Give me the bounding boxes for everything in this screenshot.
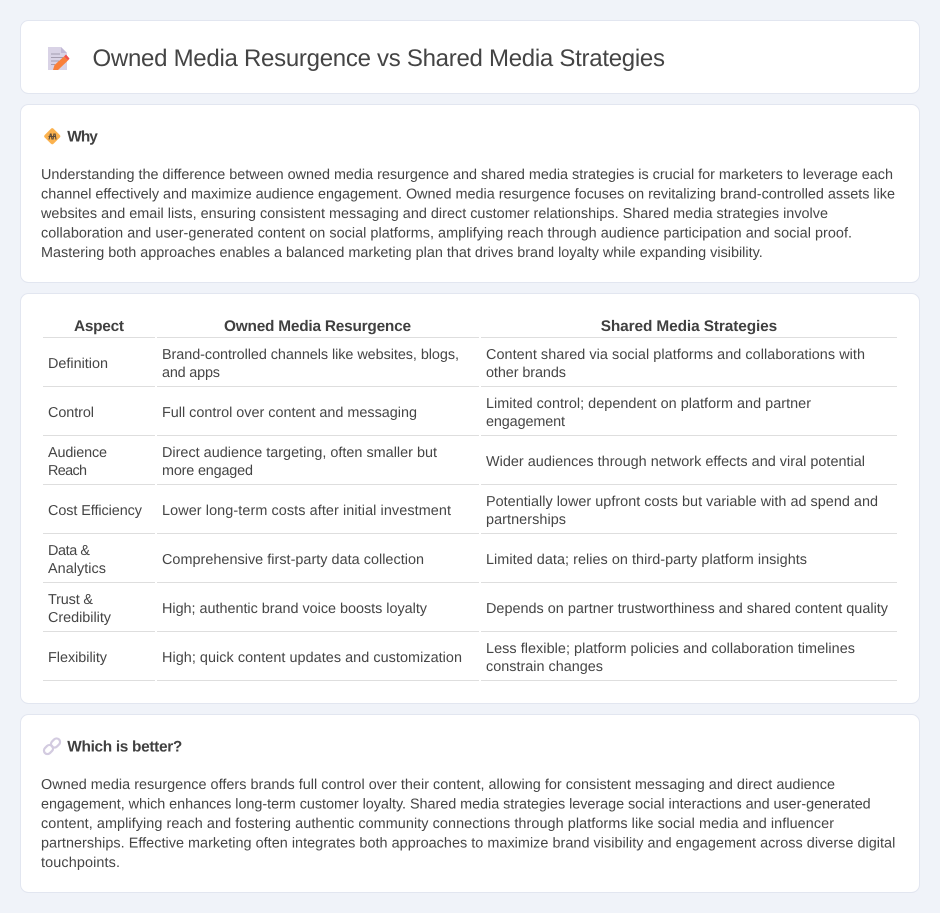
icon: document with pencil [48, 47, 70, 70]
why paragraph: collaboration and user-generated content on social platforms, amplifying reach through audience participation and social proof. [41, 226, 852, 242]
row: control: Limited control; dependent on platform and partner [486, 396, 811, 412]
title: Owned Media Resurgence vs Shared Media Strategies [92, 45, 665, 72]
row: audience reach: Reach [48, 463, 87, 479]
panel: title header [20, 20, 920, 94]
why paragraph: Mastering both approaches enables a balanced marketing plan that drives brand loyalty while expanding visibility. [41, 245, 763, 261]
row: data and analytics: Comprehensive first-party data collection [162, 552, 424, 568]
table header row [43, 318, 897, 338]
row: audience reach: Audience [48, 445, 107, 461]
heading: which is better: Which is better? [67, 738, 182, 756]
panel: which is better [20, 714, 920, 892]
row: data and analytics [43, 543, 897, 582]
row: flexibility: Flexibility [48, 650, 108, 666]
icon: orange diamond sign [43, 127, 61, 145]
table header row: Owned Media Resurgence [224, 318, 411, 335]
table header row: Aspect [74, 318, 124, 335]
panel: comparison table [20, 294, 920, 704]
row: audience reach [43, 445, 897, 484]
row: data and analytics: Analytics [48, 561, 106, 577]
row: definition: Content shared via social platforms and collaborations with [486, 347, 865, 363]
row: audience reach: more engaged [162, 463, 253, 479]
which is better paragraph: touchpoints. [41, 855, 120, 871]
why paragraph: websites and email lists, ensuring consistent messaging and direct customer relationships. Shared media strategies involve [40, 206, 828, 222]
panel: why [20, 104, 920, 282]
row: definition: Brand-controlled channels like websites, blogs, [162, 347, 459, 363]
row: definition: and apps [162, 365, 220, 381]
row: definition [43, 347, 897, 386]
row: control: Full control over content and messaging [162, 405, 417, 421]
which is better paragraph: engagement, which enhances long-term customer loyalty. Shared media strategies leverage social interactions and user-generated [41, 796, 871, 812]
why paragraph: Understanding the difference between owned media resurgence and shared media strategies is crucial for marketers to leverage each [41, 167, 893, 183]
row: audience reach: Wider audiences through network effects and viral potential [486, 454, 865, 470]
row: audience reach: Direct audience targeting, often smaller but [162, 445, 437, 461]
row: flexibility: Less flexible; platform policies and collaboration timelines [486, 641, 855, 657]
row: cost efficiency: Potentially lower upfront costs but variable with ad spend and [486, 494, 878, 510]
row: flexibility [43, 641, 897, 680]
row: data and analytics: Data & [48, 543, 90, 559]
row: trust and credibility: Trust & [48, 592, 93, 608]
row: cost efficiency [43, 494, 897, 534]
which is better paragraph [41, 777, 895, 871]
row: cost efficiency: Lower long-term costs after initial investment [162, 503, 451, 519]
which is better paragraph: partnerships. Effective marketing often integrates both approaches to maximize brand visibility and engagement across diverse digital [41, 836, 895, 852]
row: trust and credibility: High; authentic brand voice boosts loyalty [162, 601, 428, 617]
which is better paragraph: Owned media resurgence offers brands full control over their content, allowing for consistent messaging and direct audience [41, 777, 835, 793]
row: definition: other brands [486, 365, 566, 381]
row: trust and credibility [43, 592, 897, 632]
row: flexibility: High; quick content updates and customization [162, 650, 462, 666]
row: trust and credibility: Credibility [48, 610, 112, 626]
heading: why: Why [67, 128, 98, 146]
row: control: Control [48, 405, 94, 421]
row: flexibility: constrain changes [486, 659, 603, 675]
table header row: Shared Media Strategies [601, 318, 777, 335]
row: data and analytics: Limited data; relies on third-party platform insights [486, 552, 807, 568]
row: cost efficiency: partnerships [486, 512, 566, 528]
row: control [43, 396, 897, 436]
row: definition: Definition [48, 356, 108, 372]
icon: chain link [42, 737, 62, 756]
row: cost efficiency: Cost Efficiency [48, 503, 143, 519]
row: trust and credibility: Depends on partner trustworthiness and shared content quality [486, 601, 889, 617]
why paragraph: channel effectively and maximize audience engagement. Owned media resurgence focuses on revitalizing brand-controlled assets like [41, 186, 895, 202]
which is better paragraph: content, amplifying reach and fostering authentic community connections through platforms like social media and influencer [41, 816, 834, 832]
row: control: engagement [486, 414, 565, 430]
why paragraph [40, 167, 895, 261]
